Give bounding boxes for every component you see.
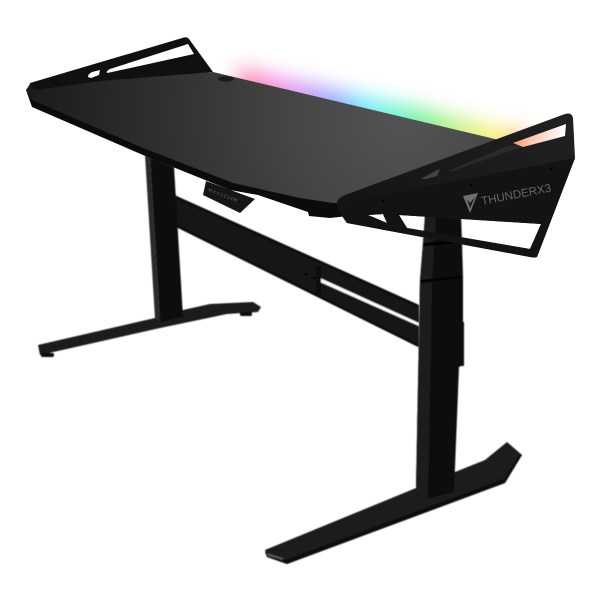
bracket window glow (513, 124, 566, 147)
crossbeam (172, 194, 419, 347)
cable grommet (218, 76, 234, 82)
desk top surface (26, 72, 535, 203)
bracket body (337, 114, 575, 258)
bracket slots (448, 145, 522, 171)
desk underside edge (26, 90, 348, 218)
left post (145, 155, 183, 322)
bracket screws (382, 200, 384, 202)
right side bracket with rainbow window (337, 114, 575, 258)
rainbow RGB glow (238, 68, 530, 175)
bracket lower face (337, 158, 575, 258)
control panel (203, 181, 255, 213)
left side bracket (30, 37, 213, 90)
beam joint notch (316, 266, 321, 295)
left foot (38, 302, 261, 357)
right leg (265, 215, 522, 564)
left leg (38, 155, 261, 357)
right post (416, 215, 464, 499)
right foot (265, 442, 522, 564)
logo mark (463, 193, 478, 213)
control panel buttons: M∧∨1234M (208, 187, 239, 203)
beam gap (320, 278, 419, 326)
logo wordmark: THUNDERX3 (480, 183, 552, 208)
